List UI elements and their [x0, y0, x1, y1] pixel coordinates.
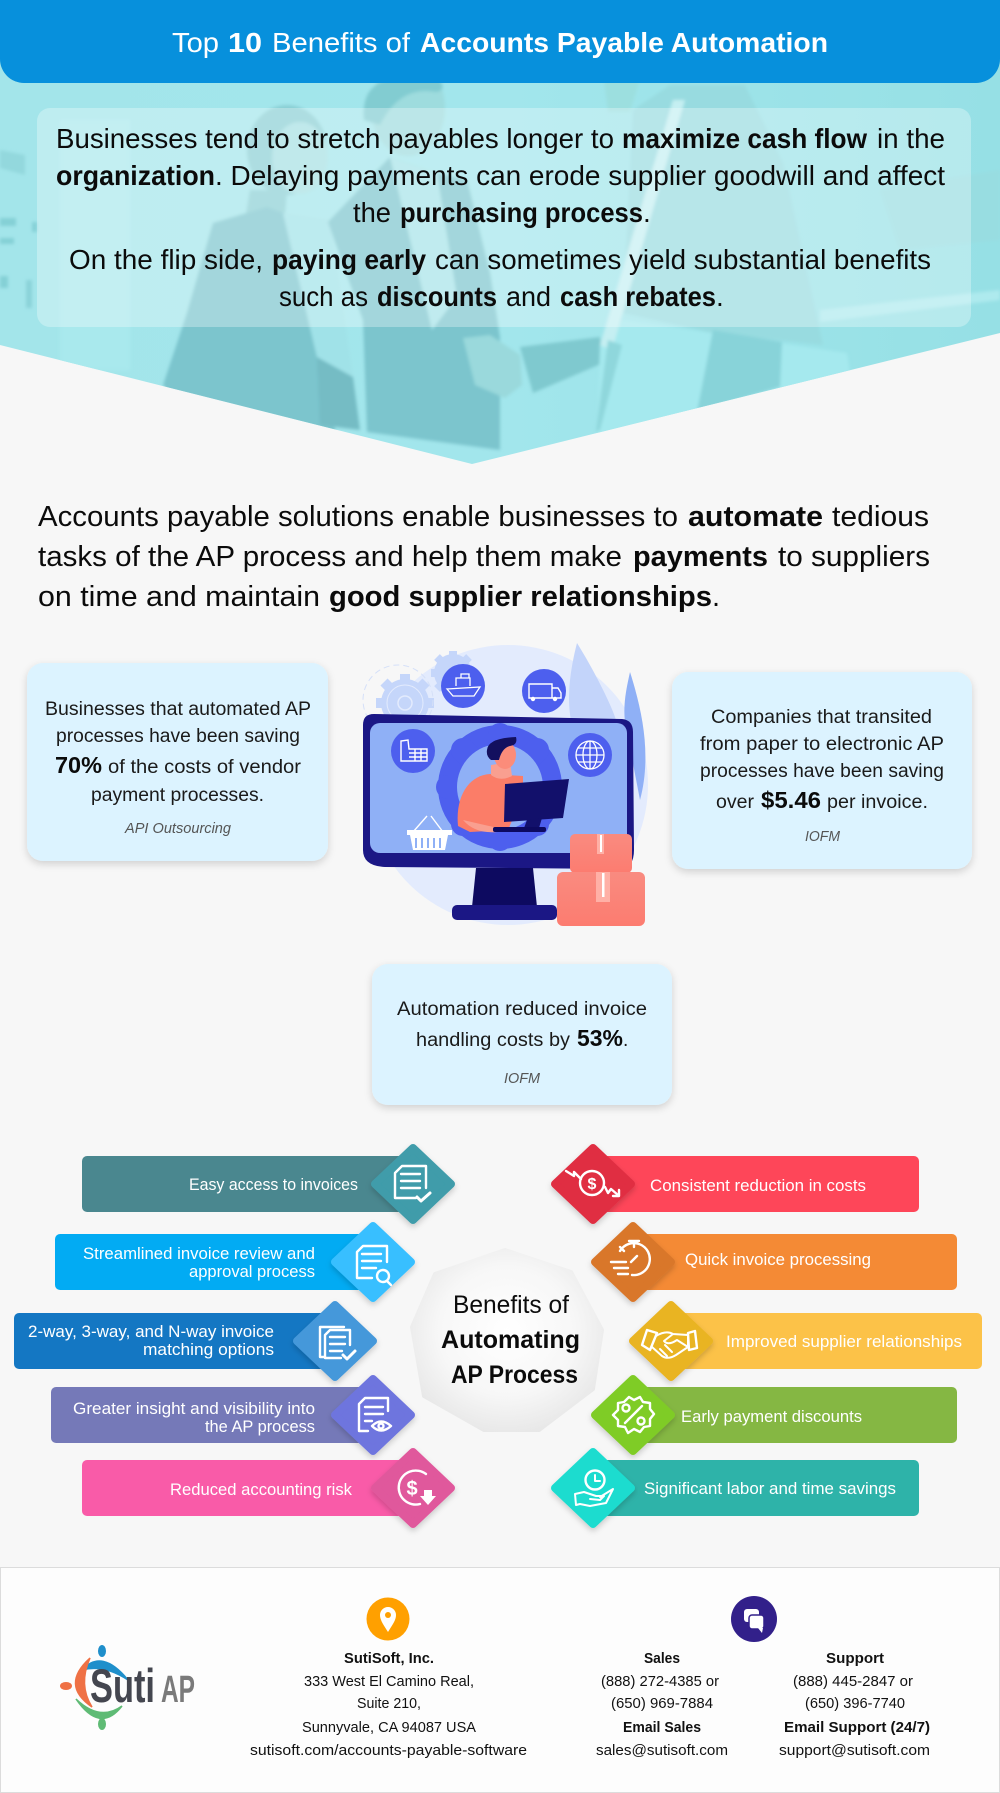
- logo: SutiAP: AP: [161, 1669, 195, 1711]
- support contact: (888) 445-2847 or: [793, 1674, 913, 1690]
- stat card: $5.46: per invoice.: [827, 792, 928, 813]
- intro panel: paying early: [272, 244, 426, 275]
- benefit: matching options: 2-way, 3-way, and N-way invoice: [28, 1322, 274, 1341]
- stat card: $5.46: [672, 672, 972, 869]
- intro panel: and: [506, 281, 551, 312]
- automation paragraph: to suppliers: [778, 541, 930, 573]
- sales contact: (650) 969-7884: [611, 1696, 713, 1712]
- stat card: 70%: of the costs of vendor: [108, 757, 302, 778]
- intro panel: maximize cash flow: [622, 123, 867, 154]
- address block: sutisoft.com/accounts-payable-software: [250, 1743, 527, 1759]
- sales contact: (888) 272-4385 or: [601, 1674, 719, 1690]
- intro panel: .: [716, 281, 724, 312]
- automation paragraph: tedious: [832, 501, 929, 533]
- woman figure: [247, 105, 327, 195]
- stat card: $5.46: IOFM: [805, 828, 840, 845]
- sales contact: [596, 1651, 728, 1759]
- address block: Suite 210,: [357, 1696, 421, 1712]
- hero photo background: [0, 60, 1000, 464]
- automation paragraph: .: [712, 581, 720, 613]
- benefit: labor and time savings: Significant labor and time savings: [644, 1479, 896, 1498]
- benefit: streamlined review: [55, 1226, 411, 1298]
- automation paragraph: payments: [633, 541, 768, 573]
- center badge: benefits of automating AP process: Automating: [441, 1326, 580, 1354]
- support contact: (650) 396-7740: [805, 1696, 905, 1712]
- automation paragraph: Accounts payable solutions enable businesses to: [38, 501, 678, 533]
- benefit: reduced accounting risk: [82, 1452, 451, 1524]
- benefit: matching options: [14, 1305, 373, 1377]
- intro panel: cash rebates: [560, 281, 716, 312]
- benefit: quick invoice processing: Quick invoice processing: [685, 1250, 871, 1269]
- leaves: [569, 643, 620, 725]
- agent: [458, 774, 523, 832]
- address block: SutiSoft, Inc.: [344, 1651, 434, 1667]
- gears: [376, 651, 475, 732]
- center badge: benefits of automating AP process: Benefits of: [453, 1291, 569, 1319]
- benefit: quick invoice processing: [595, 1226, 957, 1298]
- parcel boxes: [570, 834, 632, 873]
- title bar: Top: [172, 27, 219, 58]
- right man: [598, 332, 848, 433]
- automation paragraph: good supplier relationships: [329, 581, 712, 613]
- address block: Sunnyvale, CA 94087 USA: [302, 1720, 476, 1736]
- benefit: reduced accounting risk: $: [406, 1478, 418, 1500]
- benefit: labor and time savings: [555, 1452, 919, 1524]
- center badge: benefits of automating AP process: [412, 1250, 602, 1430]
- benefit: early payment discounts: [595, 1379, 957, 1451]
- benefit: consistent reduction in costs: [555, 1148, 919, 1220]
- intro panel: discounts: [377, 281, 497, 312]
- automation paragraph: [38, 501, 930, 613]
- stat card: $5.46: processes have been saving: [700, 761, 944, 782]
- support contact: support@sutisoft.com: [779, 1743, 930, 1759]
- logo: SutiAP: Suti: [90, 1659, 155, 1712]
- stat card: 70%: 70%: [55, 752, 102, 778]
- handshake: [463, 335, 522, 398]
- stat card: 70%: API Outsourcing: [124, 820, 232, 837]
- benefit: streamlined review: approval process: [189, 1262, 315, 1281]
- support contact: Support: [826, 1651, 884, 1667]
- illustration: support agent in monitor: [363, 643, 648, 926]
- logo: SutiAP: [60, 1645, 195, 1730]
- benefit: improved supplier relationships: [633, 1305, 982, 1377]
- central gear: [448, 735, 552, 839]
- benefit: matching options: matching options: [143, 1340, 274, 1359]
- center man: [376, 91, 444, 154]
- stat card: 53%: .: [623, 1030, 628, 1051]
- intro panel: [37, 108, 971, 327]
- stat card: $5.46: Companies that transited: [711, 707, 932, 728]
- stat card: 53%: Automation reduced invoice: [397, 999, 647, 1020]
- support contact: [779, 1651, 930, 1759]
- address block: 333 West El Camino Real,: [304, 1674, 474, 1690]
- stat card: 70%: [27, 663, 328, 861]
- stat card: 53%: IOFM: [504, 1070, 540, 1087]
- stat card: 53%: handling costs by: [416, 1030, 571, 1051]
- title bar: [0, 0, 1000, 83]
- intro panel: . Delaying payments can erode supplier goodwill and affect: [215, 160, 945, 191]
- globe icon: [576, 741, 604, 769]
- sales contact: sales@sutisoft.com: [596, 1743, 728, 1759]
- footer panel: [0, 1568, 1000, 1792]
- stat card: 53%: [372, 964, 672, 1105]
- benefit: consistent reduction in costs: Consistent reduction in costs: [650, 1176, 866, 1195]
- icon: location pin: [366, 1598, 410, 1640]
- intro panel: in the: [877, 123, 945, 154]
- intro panel: .: [643, 197, 651, 228]
- automation paragraph: tasks of the AP process and help them make: [38, 541, 622, 573]
- benefit: reduced accounting risk: Reduced accounting risk: [170, 1480, 352, 1499]
- stat card: 70%: Businesses that automated AP: [45, 699, 311, 720]
- automation paragraph: on time and maintain: [38, 581, 320, 613]
- benefit: improved supplier relationships: Improved supplier relationships: [726, 1332, 962, 1351]
- intro panel: can sometimes yield substantial benefits: [435, 244, 931, 275]
- stat card: 70%: payment processes.: [91, 785, 264, 806]
- intro panel: such as: [279, 281, 368, 312]
- support contact: Email Support (24/7): [784, 1720, 930, 1736]
- title bar: 10: [228, 27, 262, 58]
- sales contact: Email Sales: [623, 1720, 701, 1736]
- stat card: 53%: 53%: [577, 1025, 623, 1051]
- app icon circles: [441, 664, 485, 708]
- truck icon: [529, 684, 561, 698]
- automation paragraph: automate: [688, 501, 823, 533]
- stat card: $5.46: over: [716, 792, 755, 813]
- benefit: greater insight: the AP process: [205, 1417, 315, 1436]
- icon: chat bubbles: [731, 1596, 777, 1642]
- title bar: Accounts Payable Automation: [420, 27, 828, 58]
- stat card: $5.46: $5.46: [761, 787, 821, 813]
- intro panel: purchasing process: [400, 197, 643, 228]
- sales contact: Sales: [644, 1651, 680, 1667]
- basket icon: [407, 816, 452, 850]
- address block: [250, 1651, 527, 1759]
- stat card: $5.46: from paper to electronic AP: [700, 734, 944, 755]
- benefit: consistent reduction in costs: $: [588, 1176, 597, 1193]
- benefit: streamlined review: Streamlined invoice review and: [83, 1244, 315, 1263]
- factory icon: [401, 740, 427, 761]
- stat card: 70%: processes have been saving: [56, 726, 300, 747]
- benefit: easy access to invoices: [82, 1148, 451, 1220]
- intro panel: organization: [56, 160, 215, 191]
- title bar: Benefits of: [272, 27, 410, 58]
- benefit: greater insight: [51, 1379, 411, 1451]
- intro panel: Businesses tend to stretch payables longer to: [56, 123, 614, 154]
- circle backdrop: [368, 645, 648, 925]
- center badge: benefits of automating AP process: AP Process: [451, 1361, 578, 1389]
- intro panel: On the flip side,: [69, 244, 263, 275]
- benefit: greater insight: Greater insight and visibility into: [73, 1399, 315, 1418]
- monitor: [363, 714, 634, 869]
- benefit: early payment discounts: Early payment discounts: [681, 1407, 862, 1426]
- intro panel: the: [353, 197, 391, 228]
- benefit: easy access to invoices: Easy access to invoices: [189, 1175, 358, 1194]
- ship icon: [447, 674, 480, 696]
